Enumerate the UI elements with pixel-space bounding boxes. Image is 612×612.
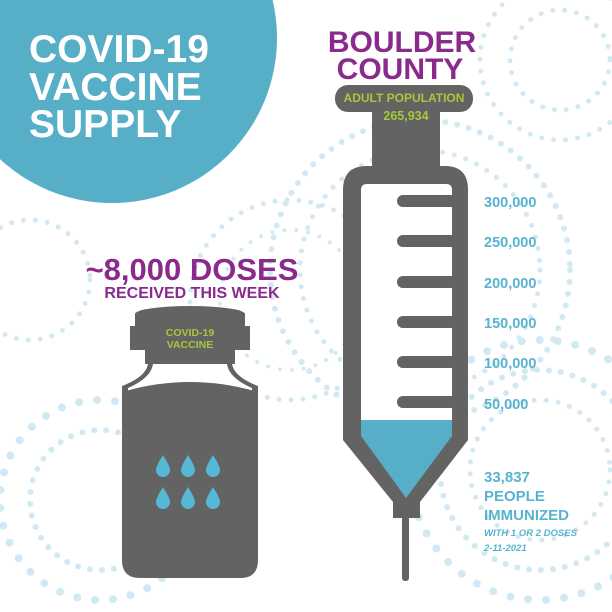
doses heading: ~8,000 DOSES <box>86 252 298 287</box>
immunized callout: IMMUNIZED <box>484 507 569 524</box>
scale labels: 250,000 <box>484 235 536 251</box>
vial: VACCINE <box>167 339 213 351</box>
scale labels <box>484 195 536 413</box>
scale labels: 300,000 <box>484 195 536 211</box>
syringe: 265,934 <box>383 109 429 123</box>
immunized callout <box>483 469 578 554</box>
title circle <box>0 0 277 203</box>
icon: drops <box>156 455 220 509</box>
heading: Boulder County: BOULDER <box>328 26 476 59</box>
scale labels: 100,000 <box>484 356 536 372</box>
vial <box>122 306 258 578</box>
scale labels: 150,000 <box>484 316 536 332</box>
scale labels: 50,000 <box>484 397 528 413</box>
syringe <box>335 85 473 581</box>
scale labels: 200,000 <box>484 276 536 292</box>
immunized callout: 33,837 <box>484 469 530 486</box>
title circle: SUPPLY <box>29 103 181 146</box>
syringe: ADULT POPULATION <box>344 91 464 105</box>
immunized callout: WITH 1 OR 2 DOSES <box>484 528 578 539</box>
heading: Boulder County <box>328 26 476 86</box>
vial: COVID-19 <box>166 327 214 339</box>
title circle: VACCINE <box>29 66 202 109</box>
title: COVID-19 <box>29 28 209 71</box>
doses heading: RECEIVED THIS WEEK <box>104 285 280 302</box>
immunized callout: PEOPLE <box>484 488 545 505</box>
heading: Boulder County: COUNTY <box>337 53 463 86</box>
immunized callout: 2-11-2021 <box>483 543 527 554</box>
